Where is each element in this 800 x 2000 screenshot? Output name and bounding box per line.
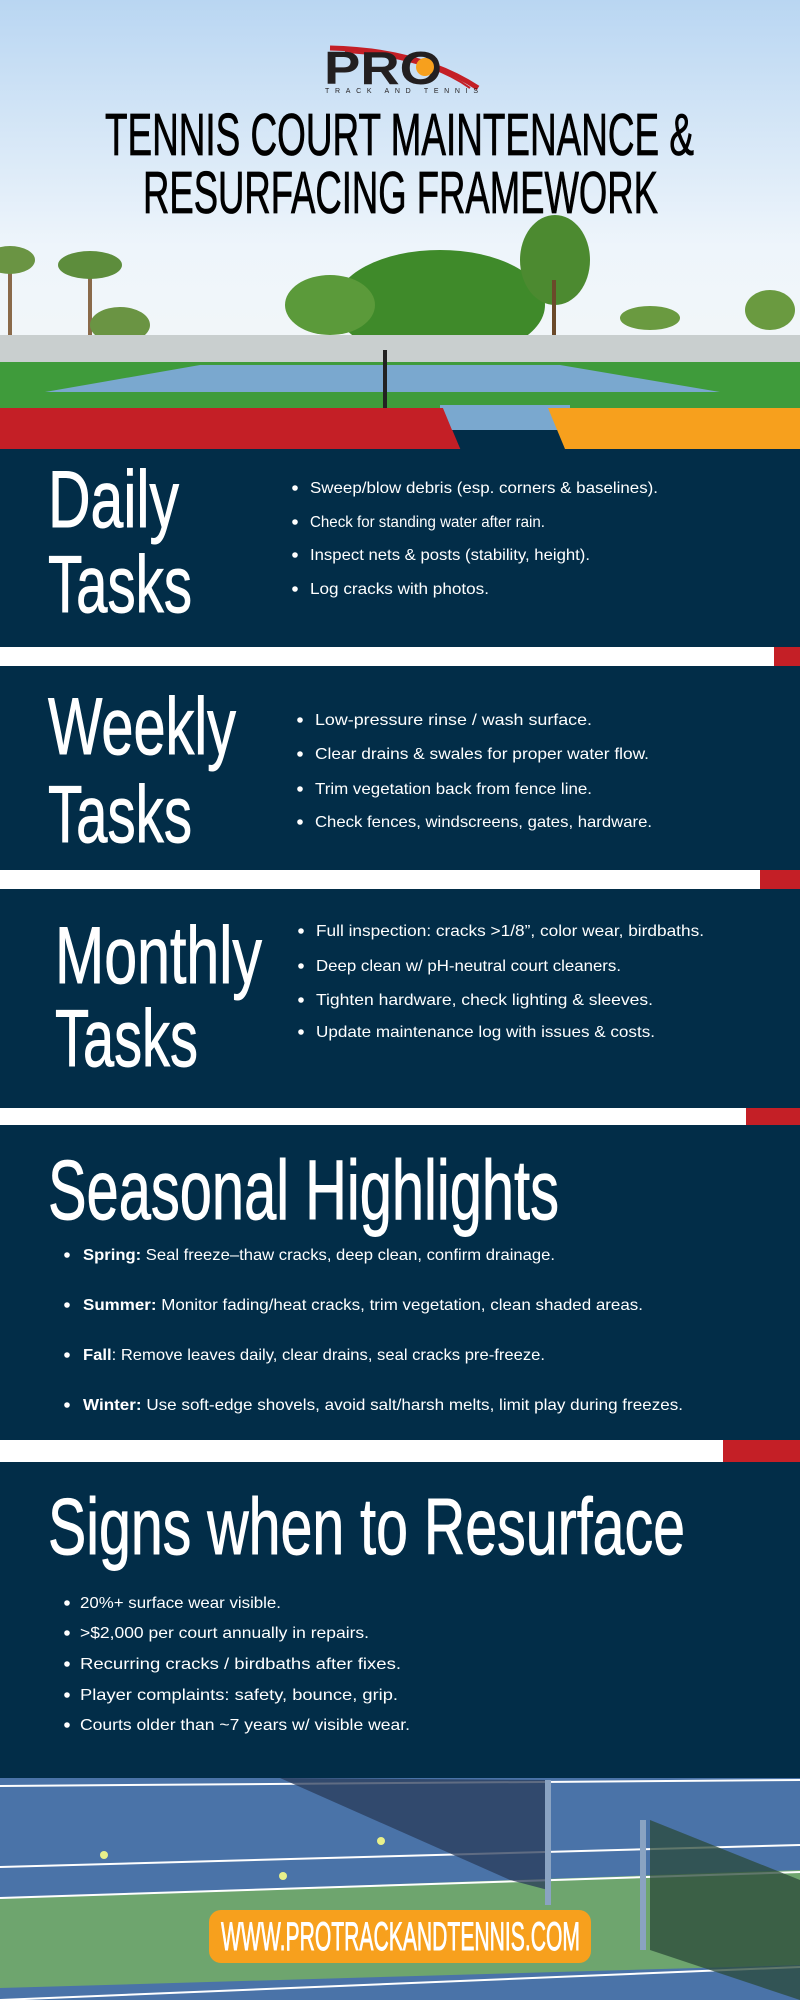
title — [105, 102, 694, 226]
list: weekly: Low-pressure rinse / wash surface. — [315, 712, 592, 729]
list: signs: Player complaints: safety, bounce, grip. — [80, 1687, 398, 1704]
list: signs: Recurring cracks / birdbaths after fixes. — [80, 1656, 401, 1673]
list: signs: Courts older than ~7 years w/ visible wear. — [80, 1717, 410, 1734]
button: website url — [209, 1910, 591, 1963]
panel: resurface — [0, 1462, 800, 1778]
list: monthly: Update maintenance log with issues & costs. — [316, 1024, 655, 1041]
heading: monthly tasks: Monthly — [55, 911, 262, 1001]
list: signs: 20%+ surface wear visible. — [80, 1595, 281, 1612]
heading: weekly tasks: Tasks — [48, 770, 192, 860]
panel: daily — [0, 449, 800, 647]
heading: seasonal highlights: Seasonal Highlights — [48, 1143, 559, 1237]
panel: weekly — [0, 666, 800, 870]
header photo — [0, 0, 800, 445]
panel: monthly — [0, 889, 800, 1108]
list: weekly: Trim vegetation back from fence line. — [315, 781, 592, 798]
heading: daily tasks — [48, 455, 192, 630]
list: daily: Inspect nets & posts (stability, height). — [310, 547, 590, 564]
list: daily: Check for standing water after rain. — [310, 514, 545, 531]
list: seasonal: Spring: Seal freeze–thaw cracks, deep clean, confirm drainage. — [83, 1247, 555, 1264]
list: seasonal: Summer: Monitor fading/heat cracks, trim vegetation, clean shaded areas. — [83, 1297, 643, 1314]
list: monthly: Full inspection: cracks >1/8”, color wear, birdbaths. — [316, 923, 704, 940]
heading: daily tasks: Daily — [48, 455, 179, 545]
list: monthly: Tighten hardware, check lighting & sleeves. — [316, 992, 653, 1009]
list: daily — [292, 480, 658, 598]
logo: TRACK AND TENNIS — [325, 88, 478, 95]
footer photo — [0, 1778, 800, 2000]
heading: daily tasks: Tasks — [48, 540, 192, 630]
list: seasonal: Winter: Use soft-edge shovels, avoid salt/harsh melts, limit play during freezes. — [83, 1397, 683, 1414]
logo: PRO — [324, 42, 442, 94]
heading: weekly tasks — [48, 682, 236, 860]
list: daily: Sweep/blow debris (esp. corners & baselines). — [310, 480, 658, 497]
heading: weekly tasks: Weekly — [48, 682, 236, 772]
list: signs: >$2,000 per court annually in repairs. — [80, 1625, 369, 1642]
list: signs — [64, 1595, 410, 1734]
list: daily: Log cracks with photos. — [310, 581, 489, 598]
color band — [0, 408, 800, 453]
list: seasonal — [64, 1247, 683, 1414]
panel: seasonal — [0, 1125, 800, 1440]
list: monthly — [298, 923, 704, 1041]
list: monthly: Deep clean w/ pH-neutral court cleaners. — [316, 958, 621, 975]
list: weekly: Clear drains & swales for proper water flow. — [315, 746, 649, 763]
heading: monthly tasks: Tasks — [55, 994, 198, 1084]
list: seasonal: Fall: Remove leaves daily, clear drains, seal cracks pre-freeze. — [83, 1347, 545, 1364]
list: weekly: Check fences, windscreens, gates, hardware. — [315, 814, 652, 831]
heading: monthly tasks — [55, 911, 262, 1084]
list: weekly — [297, 712, 652, 831]
logo — [324, 42, 478, 95]
